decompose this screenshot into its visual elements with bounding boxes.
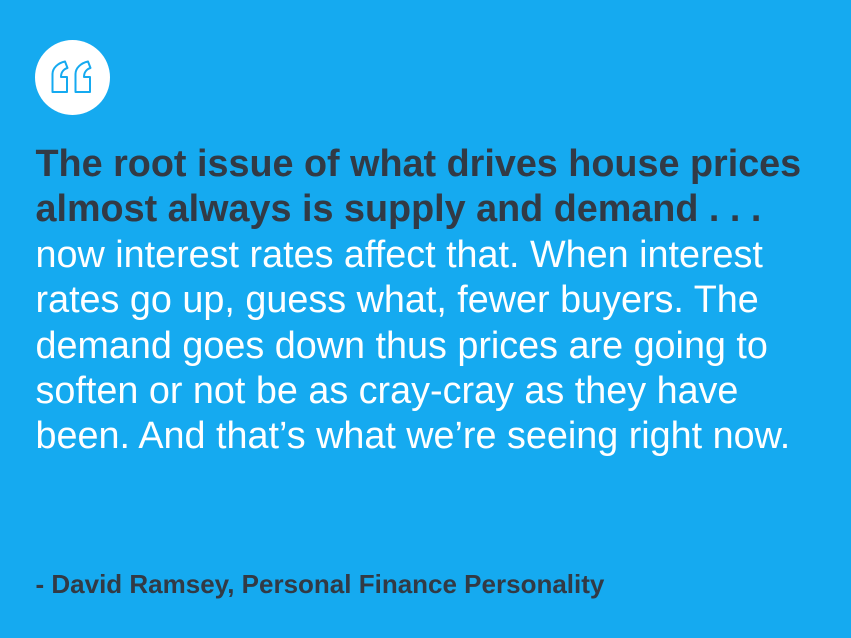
quote line 2: almost always is supply and demand . . . [36,187,761,229]
attribution: - David Ramsey, Personal Finance Personality [36,569,604,599]
icon: quotation mark badge [35,40,110,115]
quote line 3: now interest rates affect that. When interest [36,233,763,275]
quote line 7: been. And that’s what we’re seeing right now. [36,414,790,456]
quote line 1: The root issue of what drives house prices [36,142,801,184]
quote line 6: soften or not be as cray-cray as they have [36,369,738,411]
quote line 4: rates go up, guess what, fewer buyers. The [36,278,759,320]
quote text [36,142,801,456]
quote line 5: demand goes down thus prices are going to [36,324,768,366]
